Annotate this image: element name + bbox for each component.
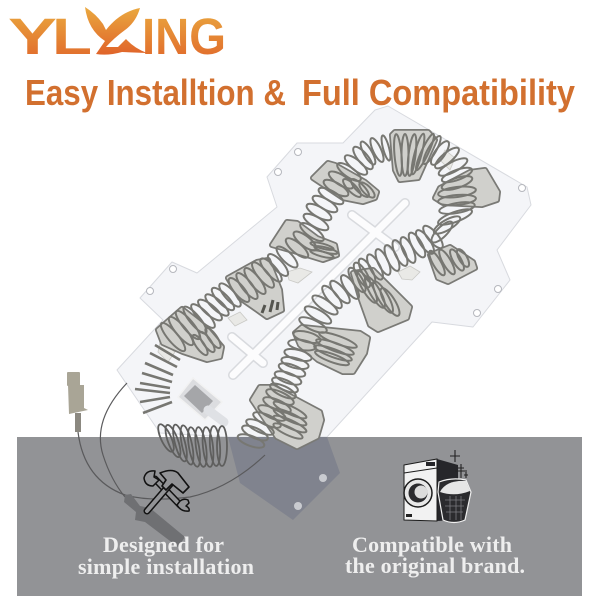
caption: installation: Designed for [103, 532, 224, 557]
logo: Y [8, 8, 57, 65]
wrench [144, 471, 189, 511]
left spokes [135, 345, 180, 413]
connector [124, 494, 185, 547]
heater plate [117, 106, 531, 437]
icon: washing machine and basket [404, 450, 471, 522]
hammer [147, 470, 189, 511]
basket [438, 479, 471, 522]
heater plate lower part under overlay [228, 437, 340, 520]
heating element tabs [158, 132, 498, 447]
title: Full Compatibility [302, 72, 575, 113]
logo [8, 7, 226, 65]
title [25, 72, 575, 113]
caption: installation: simple installation [78, 554, 254, 579]
logo: L [52, 8, 92, 65]
caption: compatibility: the original brand. [345, 553, 525, 578]
panel: gray overlay [17, 437, 582, 596]
lower-left coil [155, 422, 227, 468]
caption: compatibility [345, 532, 525, 578]
caption: installation [78, 532, 254, 579]
wires [78, 383, 265, 499]
bracket [178, 378, 224, 422]
ceramic clips [158, 150, 455, 362]
caption: compatibility: Compatible with [352, 532, 512, 557]
title: Easy Installtion & [25, 72, 286, 113]
heating coil [135, 132, 476, 450]
sparkles [450, 450, 468, 478]
icon: hammer and wrench [144, 470, 189, 511]
left terminal [67, 372, 88, 432]
logo: ING [142, 8, 226, 65]
icon: logo leaf [85, 7, 147, 55]
